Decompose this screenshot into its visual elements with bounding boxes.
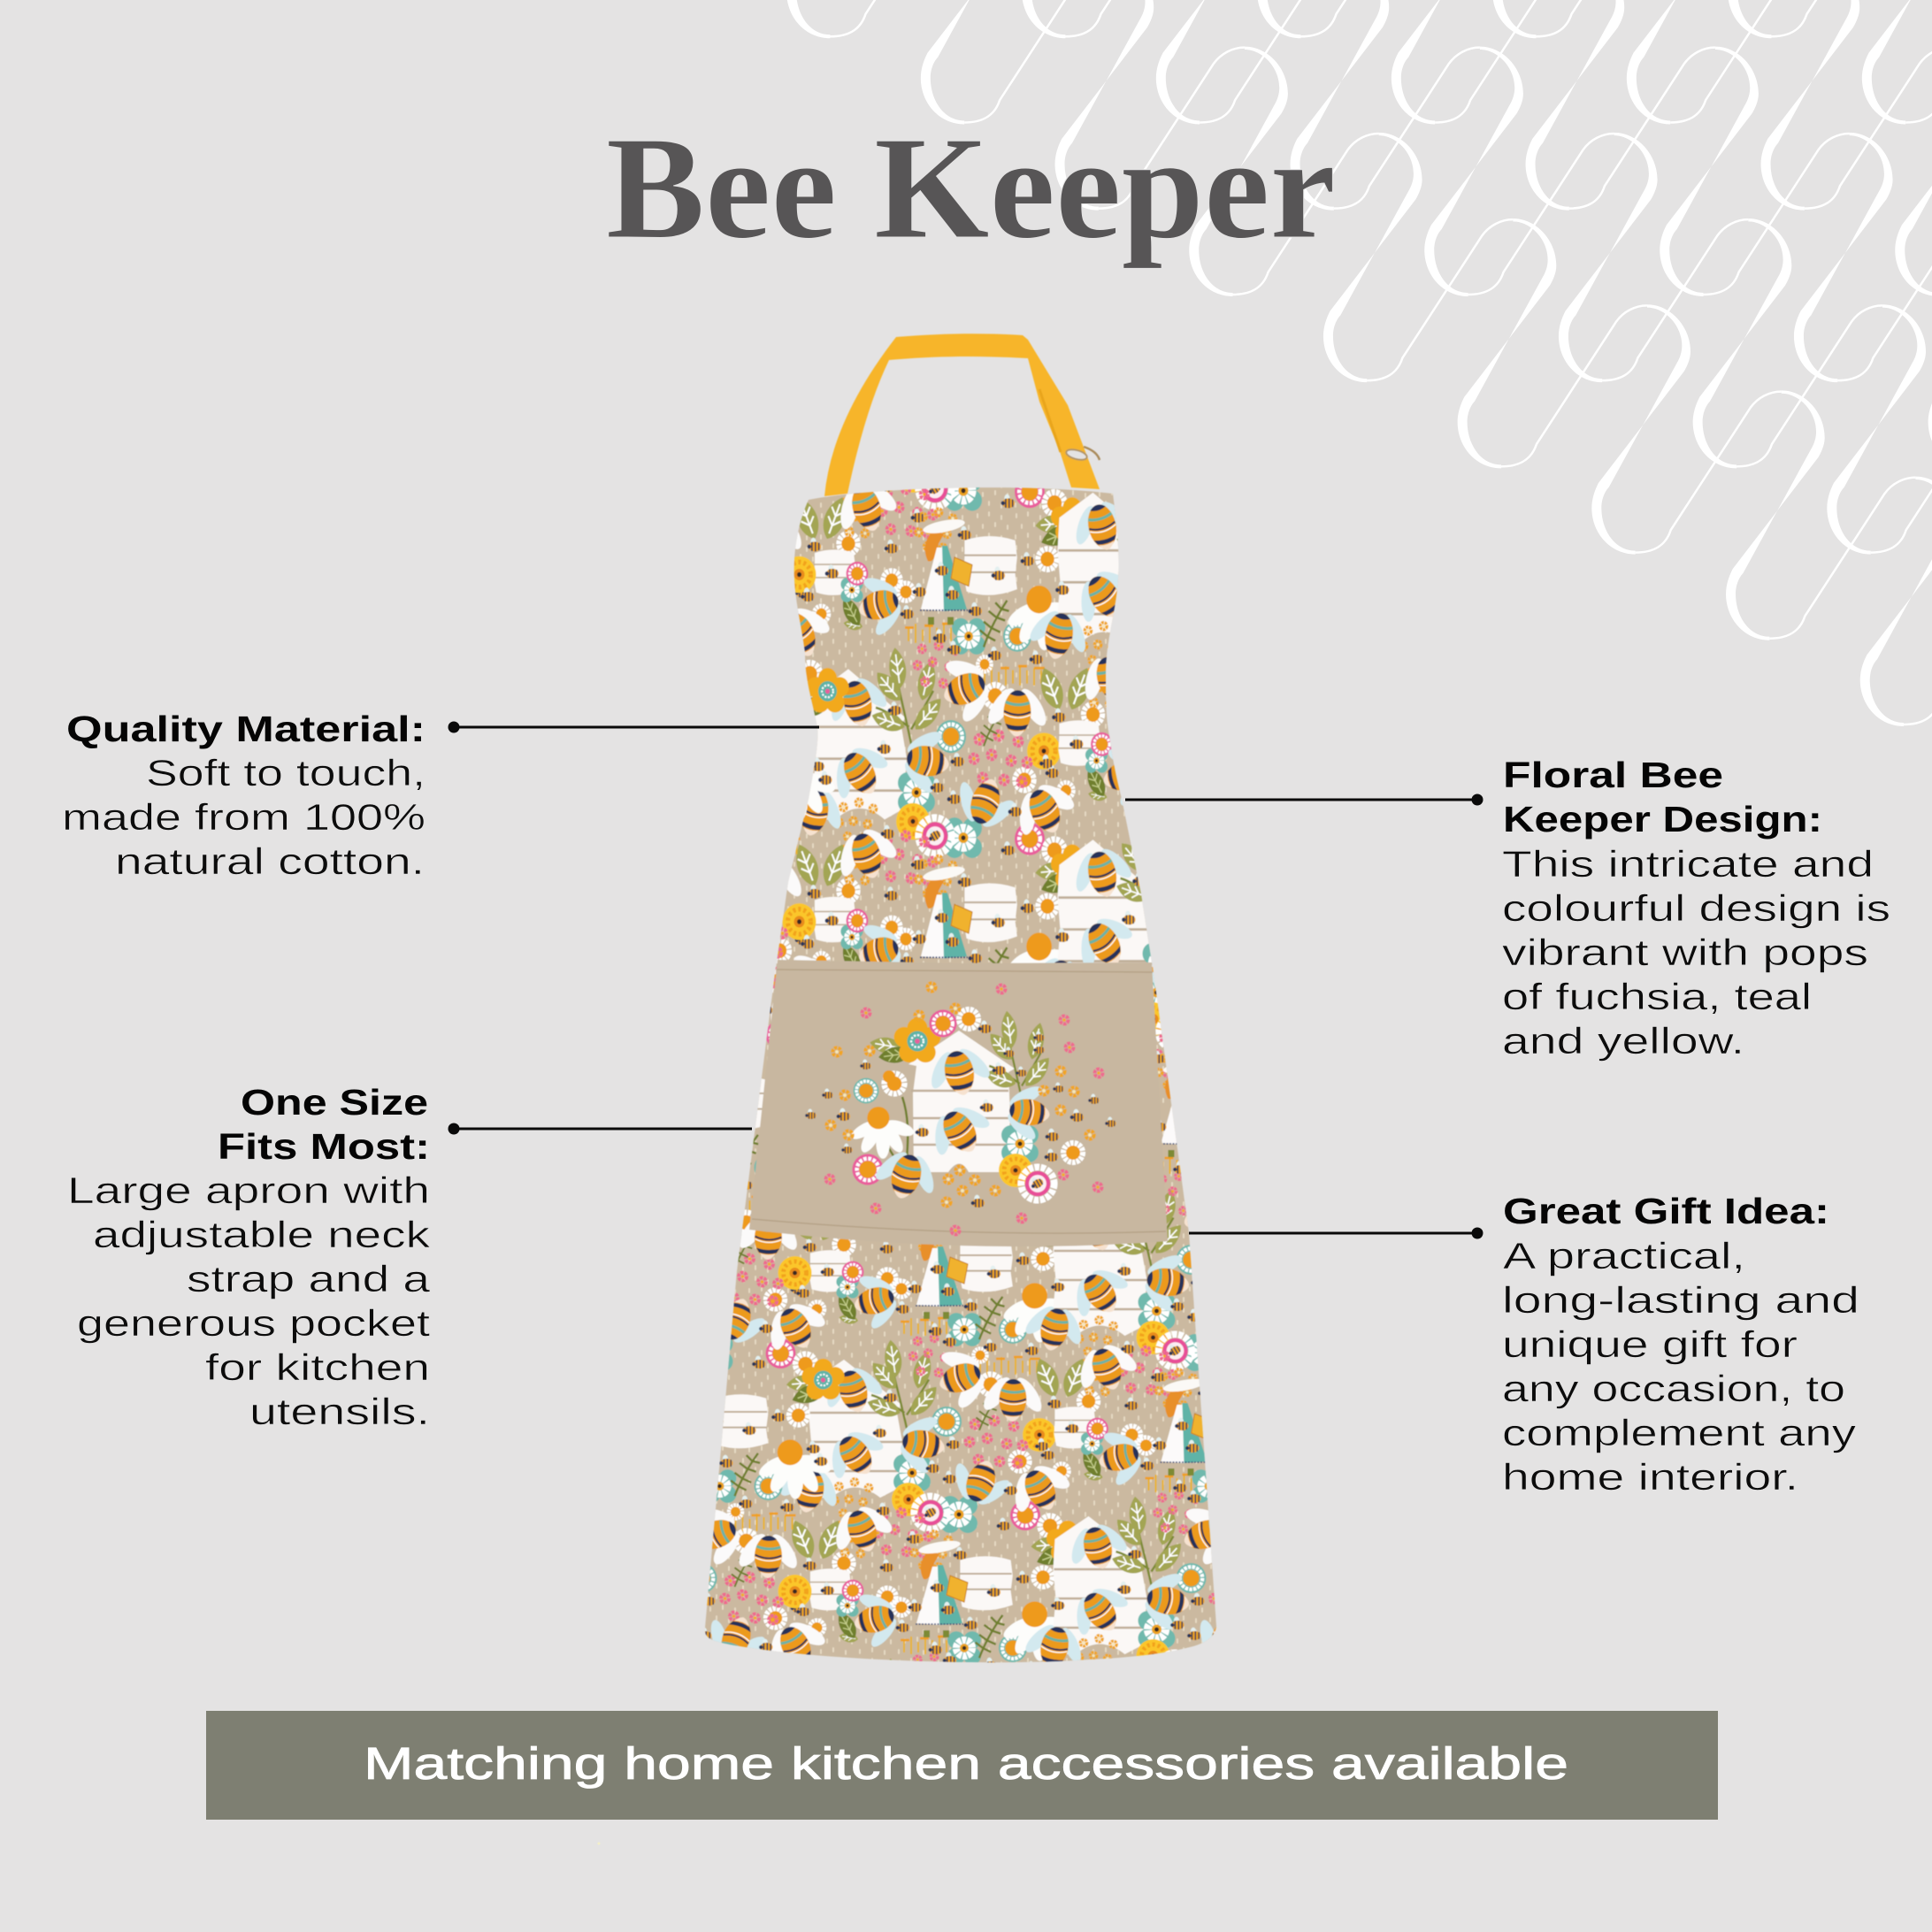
background pattern: white paperclip loops — [786, 0, 1932, 726]
pocket small blossoms — [826, 983, 1102, 1235]
text block: floral bee keeper design: Floral Bee — [1503, 755, 1723, 795]
text block: great gift idea: Great Gift Idea: — [1503, 1191, 1829, 1231]
footer banner: Matching home kitchen accessories available — [364, 1738, 1568, 1789]
text block: quality material: natural cotton. — [115, 840, 425, 882]
text block: floral bee keeper design: This intricate and — [1502, 843, 1874, 885]
text block: great gift idea: complement any — [1502, 1412, 1856, 1453]
text block: great gift idea: home interior. — [1502, 1456, 1798, 1498]
text block: one size fits most: generous pocket — [77, 1302, 430, 1344]
text block: floral bee keeper design: Keeper Design: — [1503, 799, 1822, 840]
title: Bee Keeper — [606, 106, 1336, 269]
text block: great gift idea: long-lasting and — [1502, 1279, 1859, 1321]
text block: one size fits most: One Size — [241, 1082, 428, 1123]
text block: floral bee keeper design: vibrant with pops — [1502, 932, 1868, 973]
apron skirt fabric — [705, 967, 1216, 1662]
text block: quality material — [62, 709, 426, 882]
text block: one size fits most: utensils. — [249, 1391, 430, 1432]
text block: quality material: Quality Material: — [66, 709, 426, 749]
pocket flowers and leaves — [848, 1009, 1083, 1200]
text block: floral bee keeper design: of fuchsia, teal — [1502, 976, 1812, 1017]
pocket bees — [805, 1021, 1116, 1208]
text block: floral bee keeper design: colourful design is — [1502, 887, 1890, 929]
text block: quality material: Soft to touch, — [146, 752, 426, 794]
pocket hive — [908, 1031, 1015, 1172]
text block: one size fits most: Fits Most: — [218, 1126, 430, 1167]
text block: floral bee keeper design — [1502, 755, 1890, 1062]
text block: one size fits most: Large apron with — [67, 1169, 430, 1211]
neck strap — [824, 334, 1100, 496]
text block: one size fits most — [67, 1082, 431, 1432]
apron illustration — [705, 334, 1216, 1662]
text block: great gift idea: A practical, — [1503, 1235, 1745, 1276]
text block: one size fits most: strap and a — [187, 1258, 431, 1300]
apron upper body fabric — [776, 487, 1153, 969]
text block: great gift idea — [1502, 1191, 1859, 1498]
text block: great gift idea: any occasion, to — [1502, 1368, 1845, 1409]
text block: floral bee keeper design: and yellow. — [1502, 1020, 1744, 1062]
text block: great gift idea: unique gift for — [1502, 1323, 1798, 1365]
callout leader: one size — [448, 1123, 752, 1134]
text block: one size fits most: adjustable neck — [93, 1214, 431, 1255]
pocket — [749, 960, 1168, 1246]
text block: one size fits most: for kitchen — [205, 1346, 430, 1388]
callout leader: floral design — [1125, 794, 1483, 805]
footer banner — [206, 1711, 1718, 1820]
callout leader: quality material — [448, 722, 819, 732]
callout leader: gift idea — [1189, 1228, 1483, 1238]
text block: quality material: made from 100% — [62, 796, 426, 838]
